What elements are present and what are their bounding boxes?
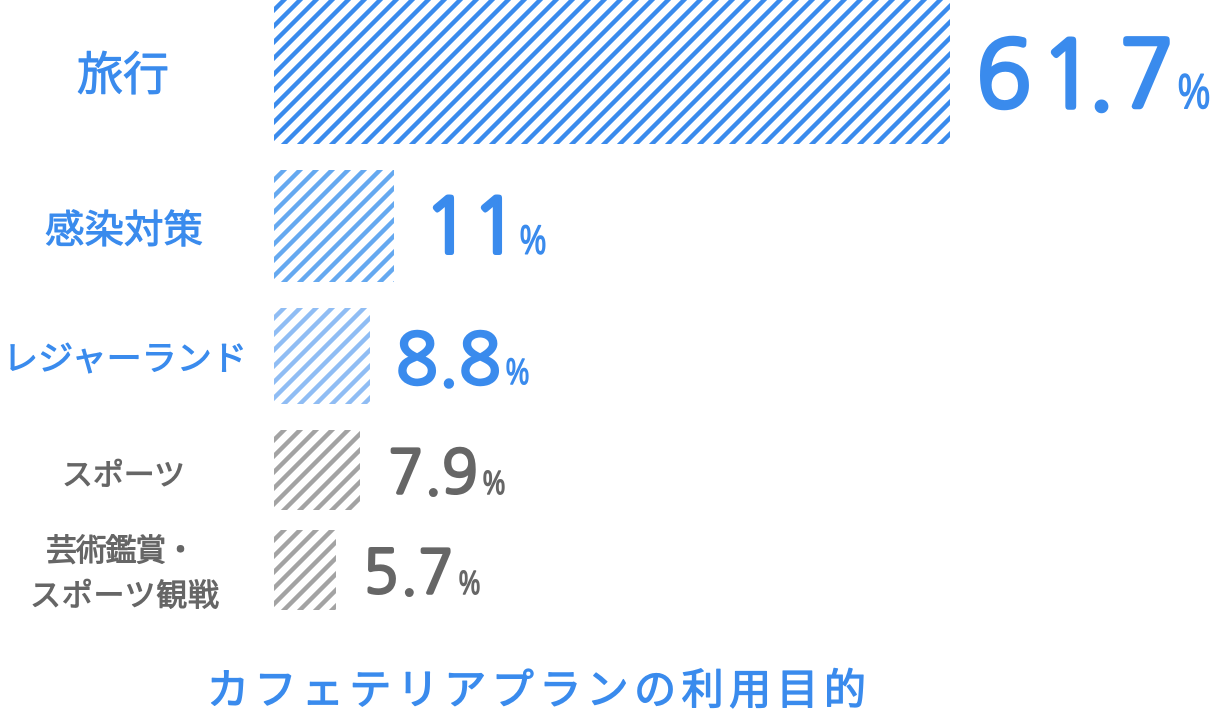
label: art appreciation and sports watching: スポーツ観戦 — [30, 578, 219, 613]
bar: sports — [274, 430, 360, 510]
row: infection control 11% — [45, 170, 546, 282]
bar: travel — [274, 0, 950, 144]
value: 8.8%: % — [506, 351, 529, 392]
value: 61.7%: 61.7 — [976, 29, 1175, 121]
bar: leisure land — [274, 308, 370, 404]
value: 7.9%: 7.9 — [388, 443, 478, 502]
value: 7.9%: % — [483, 464, 505, 501]
value: 11%: % — [520, 217, 546, 263]
row: sports 7.9% — [62, 430, 505, 510]
bar: infection control — [274, 170, 394, 282]
value: 5.7%: 5.7 — [363, 543, 454, 602]
row: leisure land 8.8% — [3, 308, 529, 404]
value: 11%: 11 — [424, 188, 518, 264]
value: 5.7%: % — [459, 564, 480, 601]
label: sports: スポーツ — [62, 459, 185, 492]
value: 8.8%: 8.8 — [396, 325, 501, 394]
label: leisure land: レジャーランド — [3, 340, 247, 378]
bar: art appreciation and sports watching — [274, 530, 336, 610]
label: travel: 旅行 — [77, 48, 169, 100]
caption: カフェテリアプランの利用目的 — [207, 666, 866, 713]
row: art appreciation and sports watching 5.7% — [30, 530, 480, 613]
label: art appreciation and sports watching — [30, 533, 219, 613]
label: infection control: 感染対策 — [45, 209, 203, 252]
label: art appreciation and sports watching: 芸術鑑賞・ — [46, 533, 196, 568]
row: travel 61.7% — [77, 0, 1210, 144]
